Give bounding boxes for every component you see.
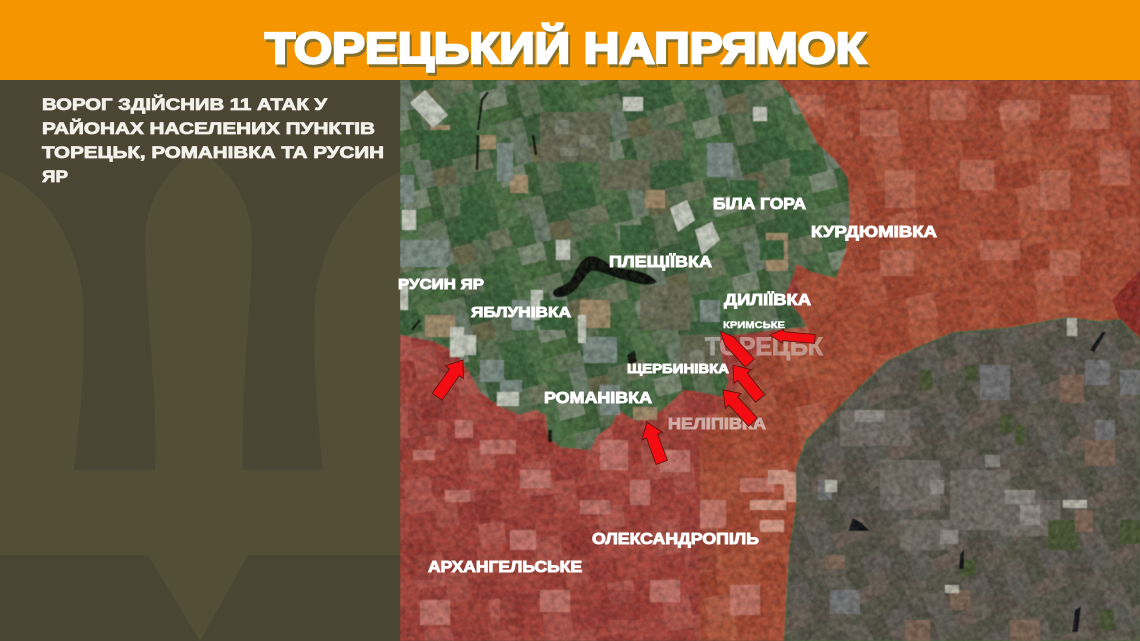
reservoir <box>553 256 657 297</box>
green zone fields <box>540 112 720 375</box>
icon: trident watermark <box>0 150 400 641</box>
title: ТОРЕЦЬКИЙ НАПРЯМОК <box>267 25 868 76</box>
text block: sidebar description: ТОРЕЦЬК, РОМАНІВКА ТА РУСИН <box>42 143 384 162</box>
grey zone: Pokrovsk side <box>785 318 1140 641</box>
occupied territory base <box>400 80 1140 641</box>
label: Олександропіль: ОЛЕКСАНДРОПІЛЬ <box>592 531 759 548</box>
panel: satellite map <box>400 80 1140 641</box>
label: Плещіївка: ПЛЕЩІЇВКА <box>609 254 712 271</box>
front-held territory <box>400 80 850 450</box>
arrow: attack towards Toretsk <box>716 327 754 367</box>
label: Русин Яр: РУСИН ЯР <box>398 277 484 293</box>
text block: sidebar description: ВОРОГ ЗДІЙСНИВ 11 АТАК У <box>42 95 328 114</box>
ponds <box>848 332 1106 632</box>
label: Курдюмівка: КУРДЮМІВКА <box>811 224 937 241</box>
satellite texture <box>400 80 1140 641</box>
label: Щербинівка: ЩЕРБИНІВКА <box>627 361 730 376</box>
text block: sidebar description <box>42 95 384 186</box>
panel: left sidebar <box>0 80 400 641</box>
label: Неліпівка: НЕЛІПІВКА <box>668 416 766 433</box>
arrow: attack towards Krymske <box>769 328 815 346</box>
label: Кримське: КРИМСЬКЕ <box>723 320 785 331</box>
label: Біла Гора: БІЛА ГОРА <box>713 196 806 213</box>
label: Романівка: РОМАНІВКА <box>544 390 652 407</box>
arrow: attack towards Romanivka <box>637 418 672 466</box>
label: Торецьк: ТОРЕЦЬК <box>705 333 824 361</box>
arrow: attack near Rusyn Yar <box>428 354 472 403</box>
occupied zone fields <box>795 90 1130 276</box>
text block: sidebar description: ЯР <box>42 167 68 186</box>
label: Яблунівка: ЯБЛУНІВКА <box>471 304 571 321</box>
title: ТОРЕЦЬКИЙ НАПРЯМОК <box>265 22 866 73</box>
text block: sidebar description: РАЙОНАХ НАСЕЛЕНИХ ПУНКТІВ <box>42 119 375 138</box>
header band <box>0 0 1140 80</box>
arrow: attack towards Shcherbynivka <box>724 358 769 405</box>
arrow: attack from Nelipivka <box>715 382 761 430</box>
label: Архангельське: АРХАНГЕЛЬСЬКЕ <box>428 559 582 576</box>
label: Дилiївка: ДИЛІЇВКА <box>724 292 811 309</box>
